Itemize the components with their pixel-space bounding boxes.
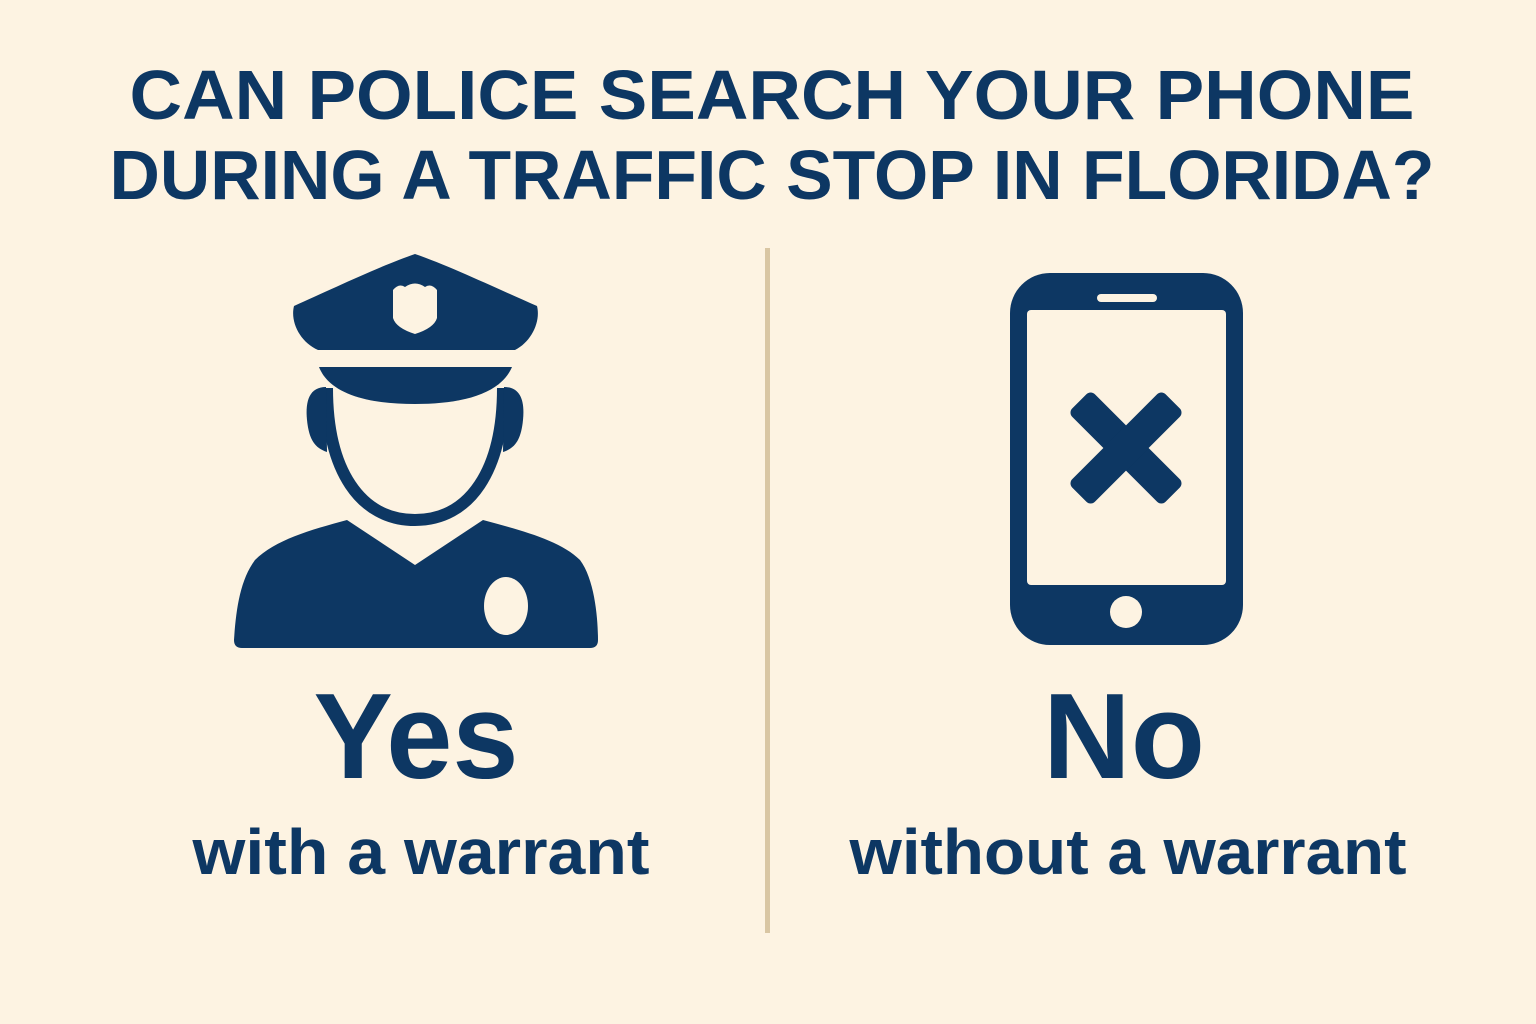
title <box>110 56 1434 214</box>
panel: yes <box>191 254 650 888</box>
divider <box>765 248 770 933</box>
icon: police officer <box>234 254 598 648</box>
title: CAN POLICE SEARCH YOUR PHONE <box>130 56 1414 134</box>
answer: yes: Yes <box>314 668 518 804</box>
panel: no <box>848 273 1406 888</box>
caption: with a warrant: with a warrant <box>191 816 650 888</box>
caption: without a warrant: without a warrant <box>848 816 1406 888</box>
title: DURING A TRAFFIC STOP IN FLORIDA? <box>110 136 1434 214</box>
answer: no: No <box>1043 668 1205 804</box>
icon: phone with x <box>1010 273 1243 645</box>
